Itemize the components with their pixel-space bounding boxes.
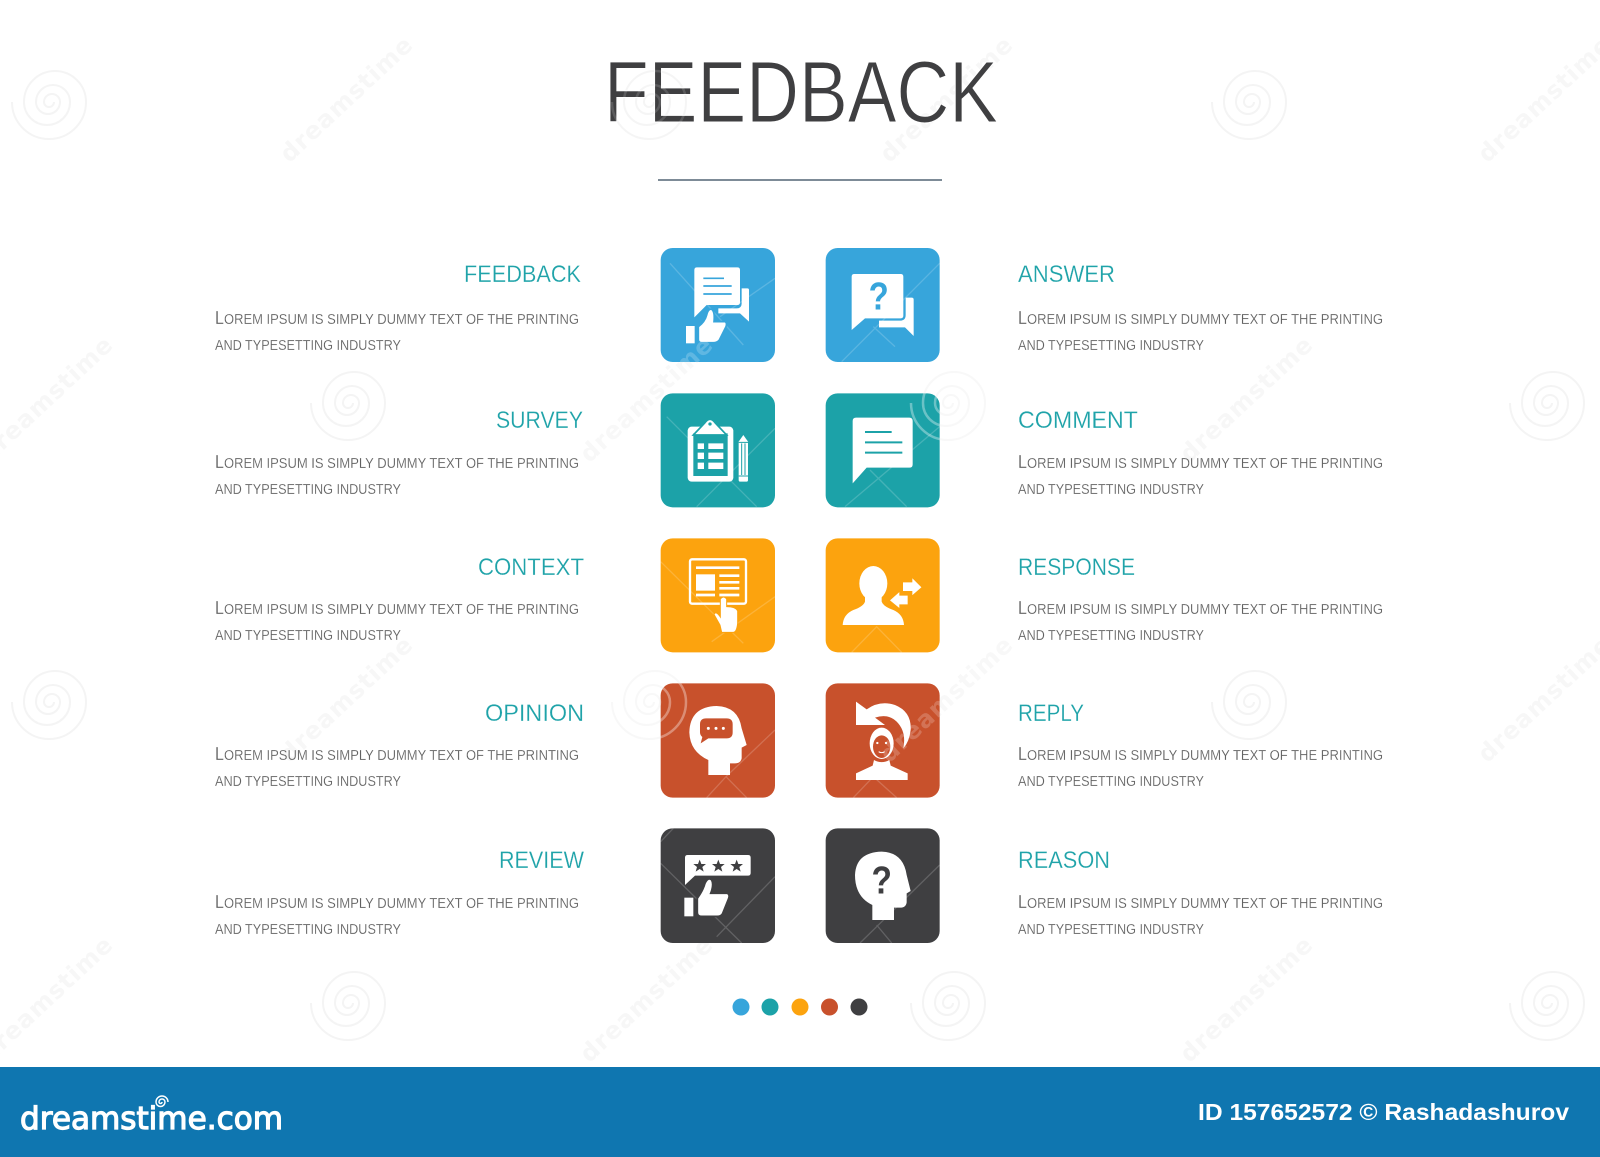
text: response	[1018, 554, 1383, 644]
right column text	[1018, 261, 1383, 938]
text: survey: AND TYPESETTING INDUSTRY	[215, 482, 401, 498]
icon tile: opinion	[661, 683, 775, 798]
icon tile: reply	[826, 683, 940, 798]
watermark layer under content: dreamstime	[874, 30, 1019, 168]
text: comment: AND TYPESETTING INDUSTRY	[1018, 482, 1204, 498]
text: context: AND TYPESETTING INDUSTRY	[215, 628, 401, 644]
text: reply	[1018, 700, 1383, 790]
text: feedback	[215, 261, 581, 354]
icon tile: answer: ?	[869, 275, 889, 318]
text: comment: COMMENT	[1018, 407, 1138, 434]
footer credit: ID 157652572 © Rashadashurov	[1198, 1099, 1569, 1125]
text: survey: SURVEY	[496, 407, 583, 434]
watermark layer under content: dreamstime	[874, 630, 1019, 768]
text: reason: AND TYPESETTING INDUSTRY	[1018, 922, 1204, 938]
icon tile: answer	[826, 248, 940, 362]
icon tile: survey	[661, 393, 775, 507]
text: opinion: OPINION	[485, 700, 584, 727]
text: feedback: FEEDBACK	[464, 261, 581, 288]
icon tile: reason: ?	[871, 858, 892, 902]
footer logo: dreamstime.com	[20, 1101, 283, 1137]
text: response: LOREM IPSUM IS SIMPLY DUMMY TEXT OF THE PRINTING	[1018, 598, 1383, 618]
text: opinion: LOREM IPSUM IS SIMPLY DUMMY TEXT OF THE PRINTING	[215, 744, 579, 764]
left column text	[215, 261, 584, 938]
text: answer: AND TYPESETTING INDUSTRY	[1018, 338, 1204, 354]
icon tile: comment	[826, 393, 940, 507]
text: reason: REASON	[1018, 847, 1110, 874]
text: context	[215, 554, 584, 644]
title underline	[658, 179, 942, 181]
watermark layer under content: dreamstime	[1174, 330, 1319, 468]
text: answer	[1018, 261, 1383, 354]
text: comment	[1018, 407, 1383, 498]
watermark overlay on title and tiles	[574, 71, 1019, 768]
icon tile: response	[826, 538, 940, 652]
icon tile: review	[661, 828, 775, 943]
icon tile: context	[661, 538, 775, 652]
text: response: RESPONSE	[1018, 554, 1135, 581]
text: feedback: LOREM IPSUM IS SIMPLY DUMMY TEXT OF THE PRINTING	[215, 308, 579, 328]
watermark layer under content: dreamstime	[274, 30, 419, 168]
text: reply: AND TYPESETTING INDUSTRY	[1018, 774, 1204, 790]
text: answer: LOREM IPSUM IS SIMPLY DUMMY TEXT OF THE PRINTING	[1018, 308, 1383, 328]
text: reason: LOREM IPSUM IS SIMPLY DUMMY TEXT OF THE PRINTING	[1018, 892, 1383, 912]
watermark overlay on title and tiles: dreamstime	[574, 330, 719, 468]
text: opinion: AND TYPESETTING INDUSTRY	[215, 774, 401, 790]
text: review: LOREM IPSUM IS SIMPLY DUMMY TEXT OF THE PRINTING	[215, 892, 579, 912]
footer banner	[0, 1067, 1600, 1157]
text: reason	[1018, 847, 1383, 938]
watermark layer under content: dreamstime	[274, 630, 419, 768]
text: review	[215, 847, 584, 938]
text: context: CONTEXT	[478, 554, 584, 581]
text: survey: LOREM IPSUM IS SIMPLY DUMMY TEXT OF THE PRINTING	[215, 452, 579, 472]
watermark layer under content: dreamstime	[574, 930, 719, 1068]
text: review: AND TYPESETTING INDUSTRY	[215, 922, 401, 938]
text: review: REVIEW	[499, 847, 584, 874]
watermark overlay on title and tiles: dreamstime	[874, 630, 1019, 768]
title: FEEDBACK	[604, 44, 998, 141]
pagination dots	[732, 998, 868, 1016]
text: reply: LOREM IPSUM IS SIMPLY DUMMY TEXT OF THE PRINTING	[1018, 744, 1383, 764]
watermark layer under content: dreamstime	[1174, 930, 1319, 1068]
text: reply: REPLY	[1018, 700, 1084, 727]
text: context: LOREM IPSUM IS SIMPLY DUMMY TEXT OF THE PRINTING	[215, 598, 579, 618]
text: comment: LOREM IPSUM IS SIMPLY DUMMY TEXT OF THE PRINTING	[1018, 452, 1383, 472]
text: answer: ANSWER	[1018, 261, 1115, 288]
text: opinion	[215, 700, 584, 790]
text: survey	[215, 407, 583, 498]
icon tile: feedback	[661, 248, 775, 362]
text: feedback: AND TYPESETTING INDUSTRY	[215, 338, 401, 354]
text: response: AND TYPESETTING INDUSTRY	[1018, 628, 1204, 644]
icon tile: reason	[826, 828, 940, 943]
watermark layer under content: dreamstime	[574, 330, 719, 468]
